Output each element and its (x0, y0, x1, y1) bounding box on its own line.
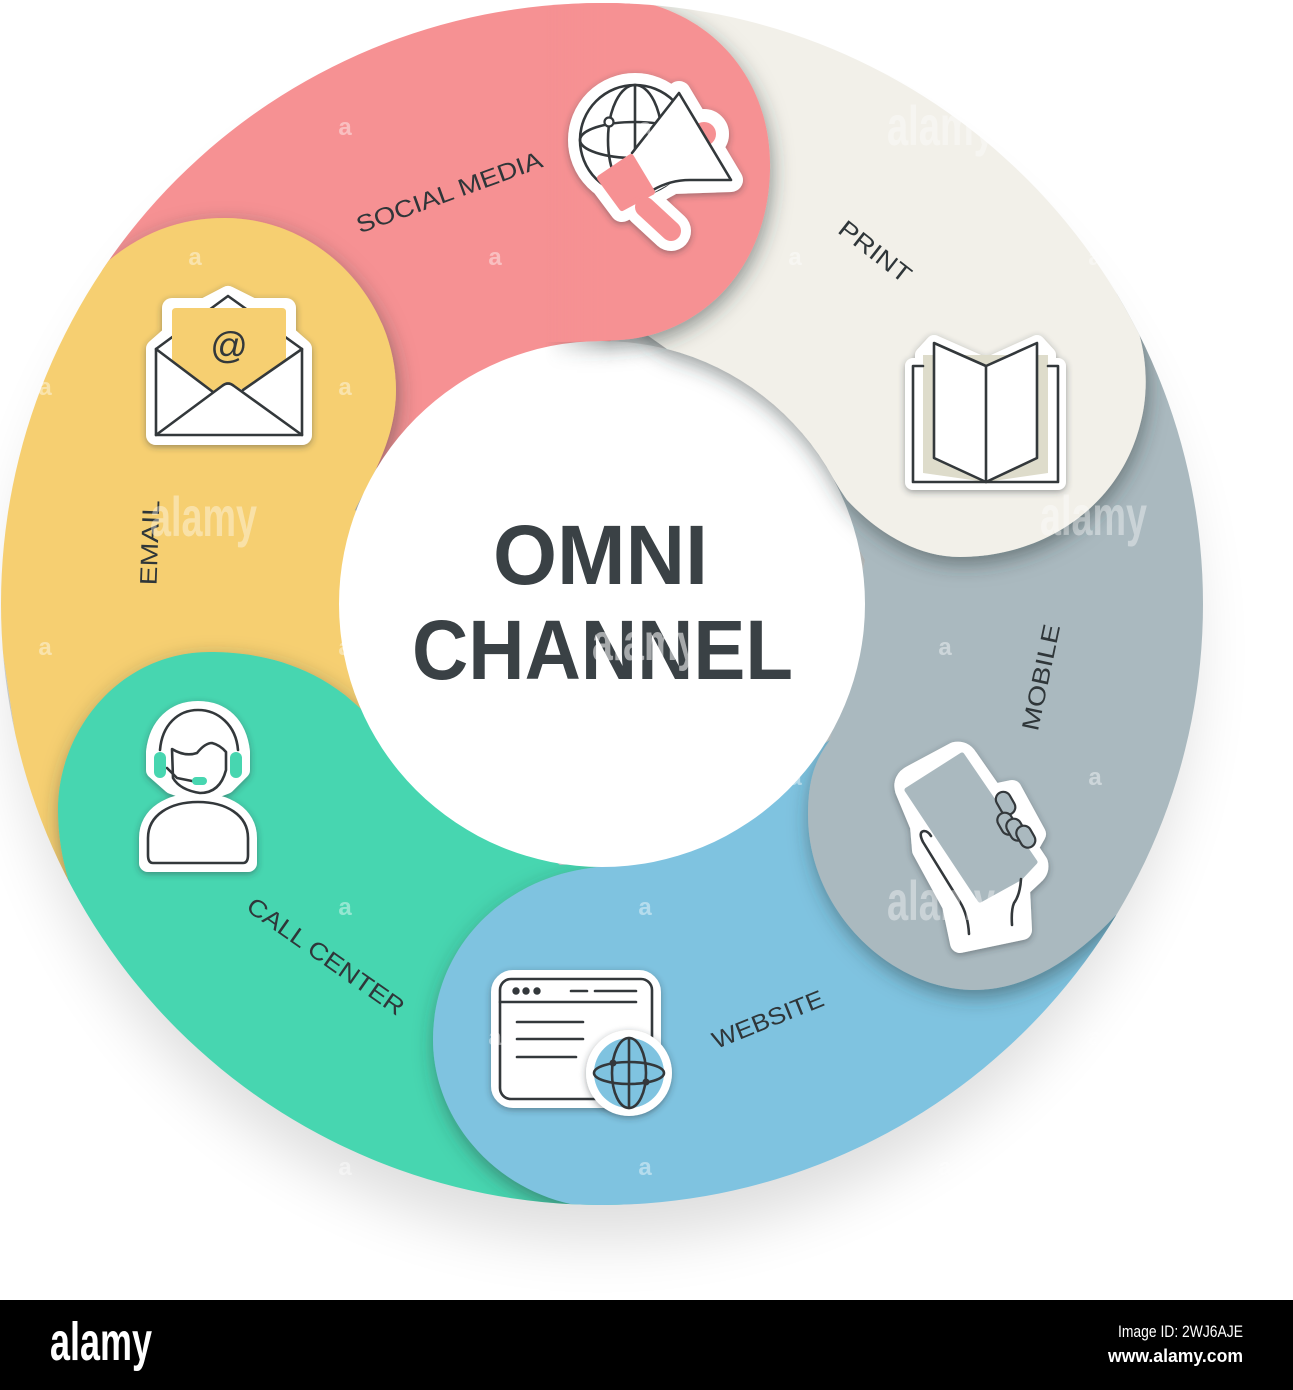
segment: website (422, 738, 1116, 1205)
label: social media: SOCIAL MEDIA (353, 147, 546, 239)
footer image id: Image ID: 2WJ6AJE (1118, 1322, 1243, 1341)
title: omni channel (412, 508, 793, 697)
circle ground shadow (12, 60, 1192, 1240)
label: website: WEBSITE (708, 985, 828, 1055)
center circle (339, 341, 865, 867)
watermarks: a (788, 764, 802, 791)
watermarks: a (38, 634, 52, 661)
segment: social media lobe (500, 0, 770, 342)
watermarks: a (338, 114, 352, 141)
watermarks: alamy (887, 94, 995, 157)
watermarks: a (638, 114, 652, 141)
title: omni channel: OMNI (493, 508, 708, 602)
watermarks: a (938, 374, 952, 401)
watermarks: a (1088, 764, 1102, 791)
segment: mobile (800, 290, 1260, 990)
watermarks: a (338, 894, 352, 921)
icon: call center agent with headset (148, 710, 248, 863)
watermarks: a (188, 244, 202, 271)
segment: email (0, 218, 450, 900)
watermarks: a (338, 1154, 352, 1181)
watermarks: a (638, 894, 652, 921)
footer logo: alamy (50, 1312, 152, 1372)
watermarks: a (488, 1024, 502, 1051)
icon: globe and megaphone (580, 85, 731, 231)
watermarks: a (788, 244, 802, 271)
footer url: www.alamy.com (1107, 1346, 1243, 1366)
watermarks: a (938, 634, 952, 661)
watermarks: a (1088, 1024, 1102, 1051)
watermarks: a (338, 634, 352, 661)
watermark over title: alamy (592, 614, 698, 672)
watermarks: a (638, 1154, 652, 1181)
watermarks: a (938, 1154, 952, 1181)
footer bar (0, 1300, 1293, 1390)
segment: social media base (60, 0, 630, 470)
watermarks: alamy (887, 869, 995, 932)
watermarks: alamy (1040, 484, 1147, 547)
label: print: PRINT (833, 215, 917, 289)
icon: hand holding phone (904, 752, 1038, 943)
label: email: EMAIL (136, 500, 165, 586)
watermarks: a (488, 244, 502, 271)
icon: browser window with globe (500, 979, 672, 1116)
at sign: @ (210, 325, 248, 366)
watermarks: a (338, 374, 352, 401)
watermarks: a (1088, 244, 1102, 271)
label: call center: CALL CENTER (241, 892, 409, 1021)
icon: open envelope with at sign (156, 296, 302, 435)
label: mobile: MOBILE (1017, 622, 1066, 733)
title: omni channel: CHANNEL (412, 603, 793, 697)
watermarks: alamy (150, 485, 257, 548)
watermarks: a (38, 374, 52, 401)
segment: call center (46, 644, 623, 1205)
watermarks (38, 94, 1147, 1181)
icon: open book (913, 343, 1058, 482)
segment: print (634, 6, 1160, 577)
